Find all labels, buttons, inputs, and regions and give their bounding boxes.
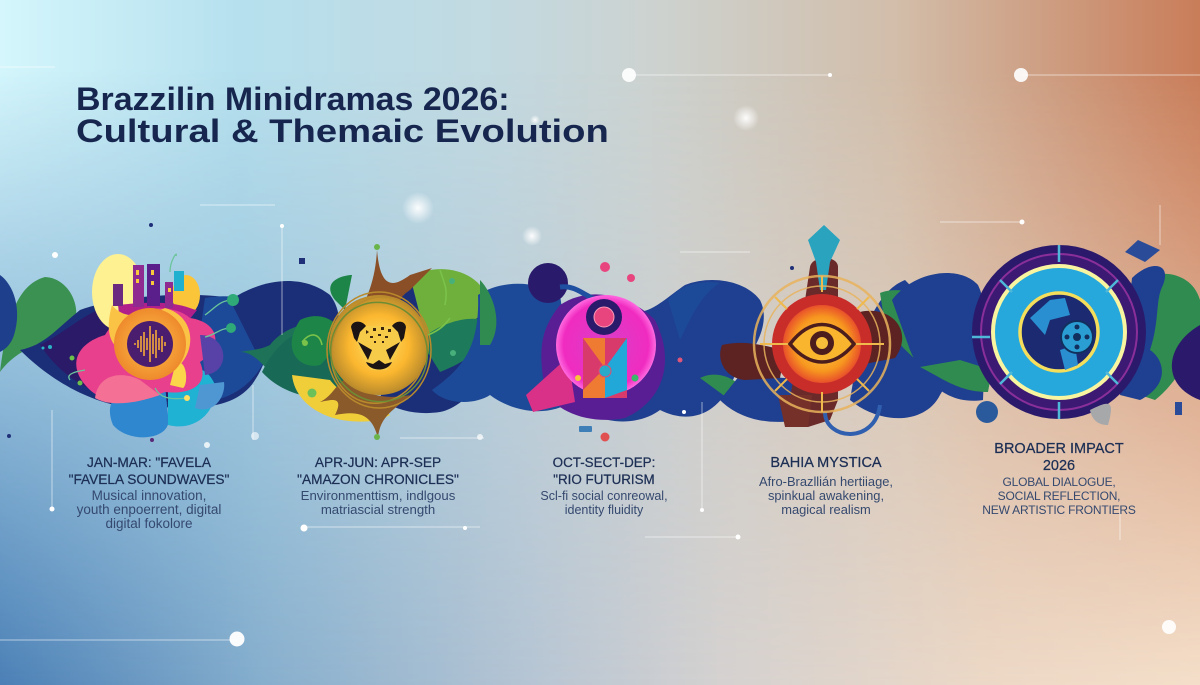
caption: broader impact: GLOBAL DIALOGUE, [1002,475,1116,489]
stage 2 icon: amazon jaguar [292,244,456,440]
title [76,81,609,148]
glow dots [50,68,1176,646]
title: Brazzilin Minidramas 2026: [76,81,510,117]
stage 3 icon: rio futurism [526,262,682,442]
stage 1 icon: favela soundwaves [42,254,239,437]
caption: broader impact [982,441,1136,517]
caption: rio futurism: "RIO FUTURISM [553,472,655,486]
caption: amazon chronicles: Environmenttism, indlgous [301,488,455,503]
caption: broader impact: 2026 [1043,458,1075,474]
stage 4 icon: bahia eye [720,225,902,434]
title: Cultural & Themaic Evolution [76,112,609,148]
caption: amazon chronicles: matriascial strength [321,502,435,517]
caption: amazon chronicles [297,455,459,517]
caption: favela soundwaves [69,455,229,531]
small navy accents [7,223,794,442]
caption: favela soundwaves: digital fokolore [105,516,193,531]
caption: broader impact: SOCIAL REFLECTION, [998,489,1120,503]
caption: bahia mystica: spinkual awakening, [768,488,884,503]
stage 5 icon: global impact [972,240,1182,425]
caption: rio futurism: OCT-SECT-DEP: [553,455,655,470]
caption: amazon chronicles: APR-JUN: APR-SEP [315,455,441,470]
caption: bahia mystica: Afro-Brazllián hertiiage, [759,474,893,488]
caption: rio futurism: Scl-fi social conreowal, [540,489,668,503]
caption: broader impact: BROADER IMPACT [994,441,1124,457]
ribbon wave [0,266,1200,422]
caption: amazon chronicles: "AMAZON CHRONICLES" [297,472,459,486]
caption: favela soundwaves: youth enpoerrent, digital [77,502,221,517]
caption: bahia mystica [759,455,893,517]
caption: favela soundwaves: "FAVELA SOUNDWAVES" [69,472,229,486]
caption: bahia mystica: BAHIA MYSTICA [770,455,882,471]
caption: rio futurism [540,455,668,517]
caption: broader impact: NEW ARTISTIC FRONTIERS [982,503,1136,517]
caption: bahia mystica: magical realism [781,502,871,517]
caption: favela soundwaves: JAN-MAR: "FAVELA [87,455,211,470]
caption: rio futurism: identity fluidity [565,503,643,517]
caption: favela soundwaves: Musical innovation, [92,488,206,503]
